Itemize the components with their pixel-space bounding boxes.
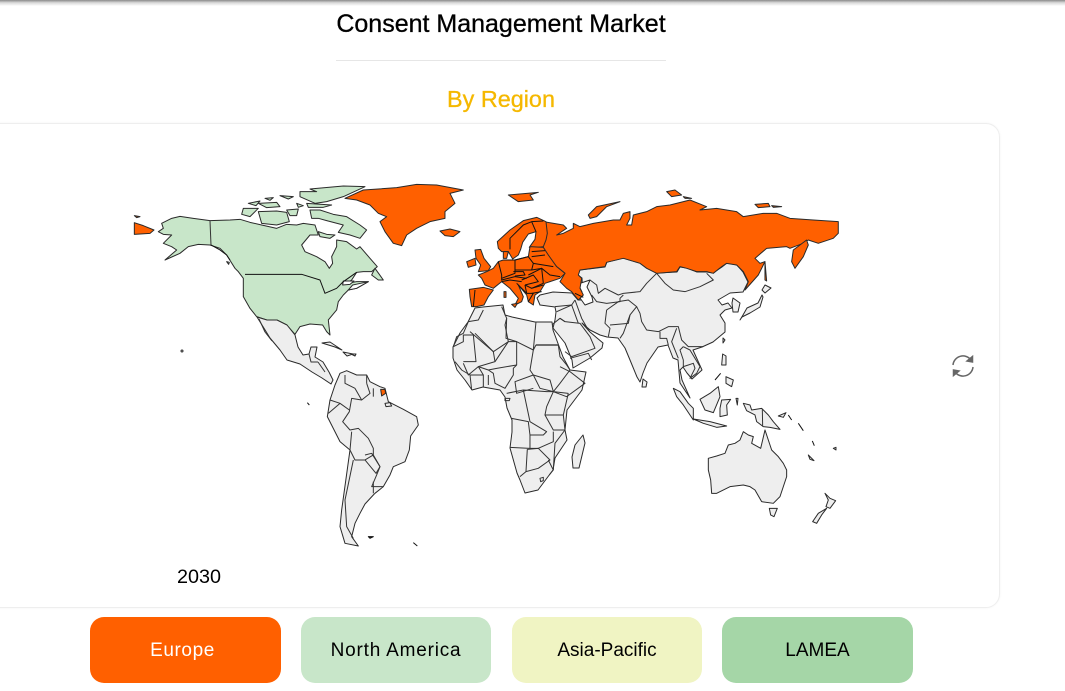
legend: LAMEA: LAMEA — [785, 640, 850, 661]
legend: Europe — [90, 617, 281, 683]
region: North America (green) — [158, 186, 383, 335]
year label: 2030 — [177, 566, 221, 588]
region: Greenland, Iceland and Chukotka (orange) — [134, 184, 463, 246]
region: Southeast Asia and Oceania (grey) — [673, 354, 836, 523]
legend: North America: North America — [331, 640, 461, 661]
legend: LAMEA — [722, 617, 913, 683]
legend: Europe: Europe — [150, 640, 215, 661]
region: Russia (orange) — [508, 190, 838, 300]
legend: North America — [301, 617, 491, 683]
region: Europe (orange) — [467, 217, 583, 307]
region: Asia and Middle East (grey) — [537, 258, 771, 398]
region: Africa (grey) — [453, 305, 586, 493]
region: South America (grey) — [307, 371, 418, 546]
title: Consent Management Market — [336, 10, 666, 38]
subtitle: By Region — [447, 86, 555, 112]
panel: map card — [0, 123, 1000, 608]
icon: refresh — [952, 355, 974, 377]
region: Mexico, Central America and Caribbean (grey) — [181, 317, 356, 384]
legend: Asia-Pacific — [512, 617, 702, 683]
legend: Asia-Pacific: Asia-Pacific — [557, 640, 657, 661]
top shadow bar — [0, 0, 1065, 6]
